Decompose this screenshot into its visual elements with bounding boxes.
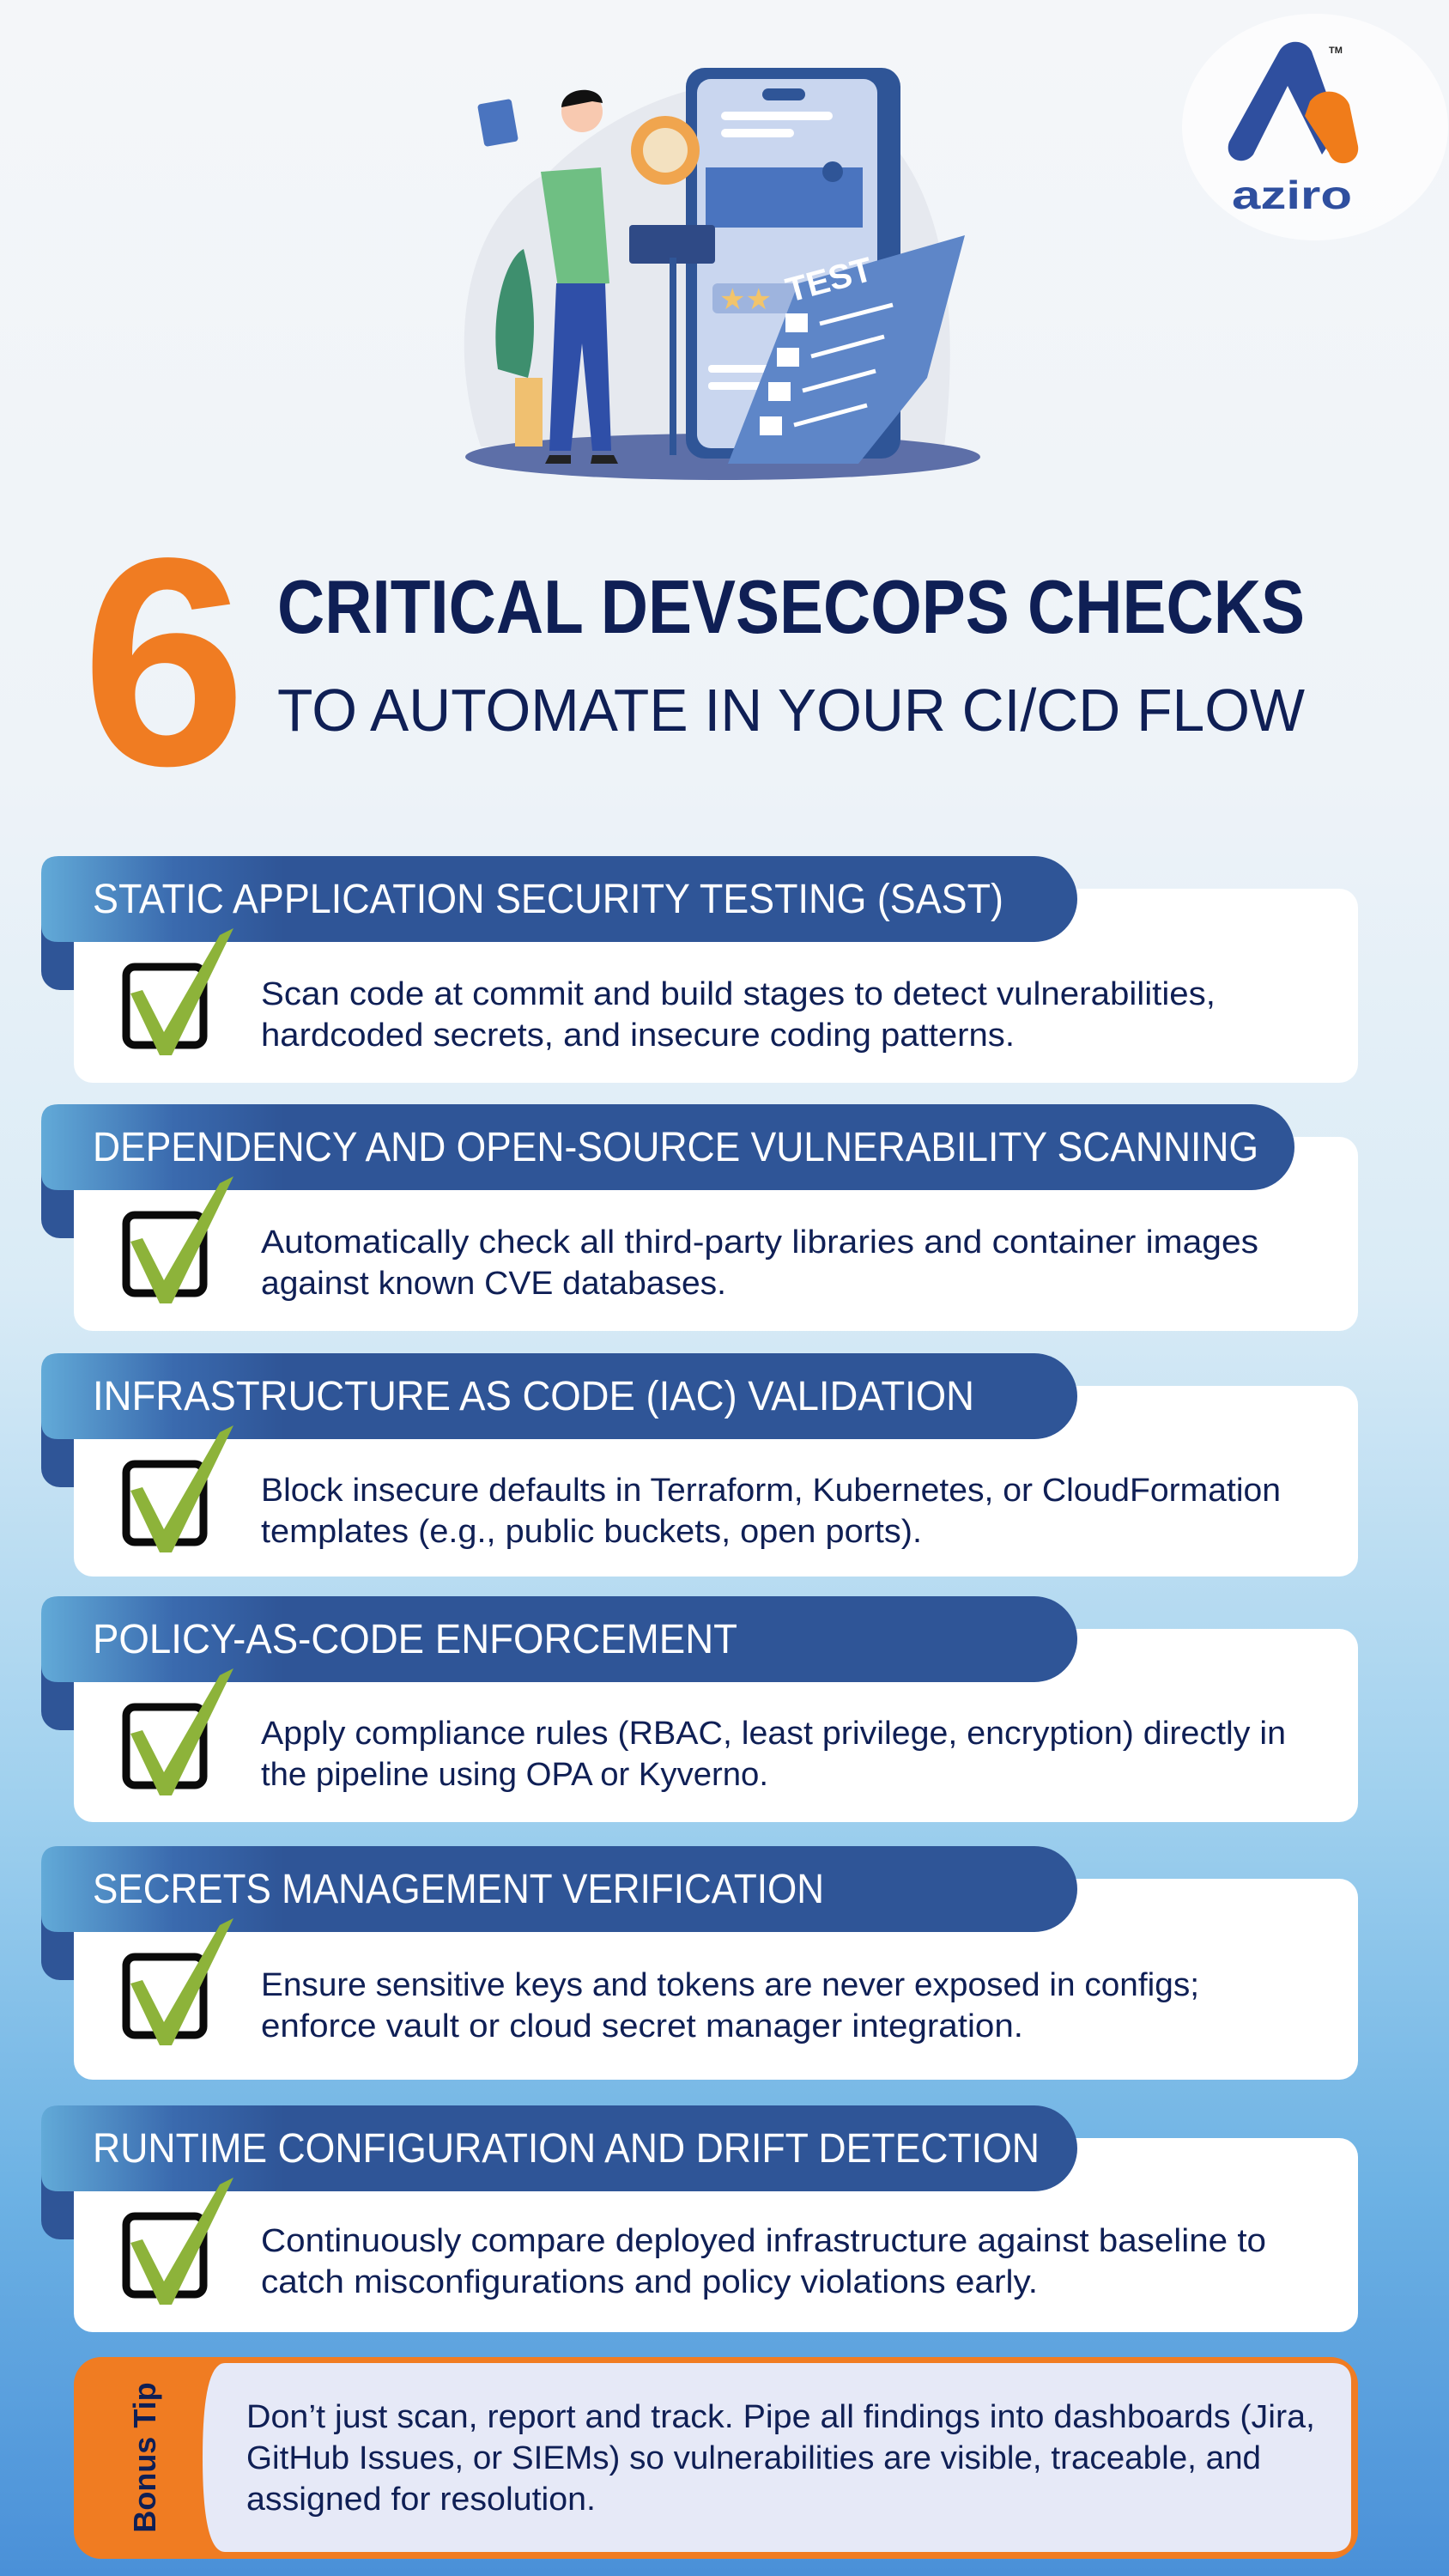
bonus tip panel: Don’t just scan, report and track. Pipe all findings into dashboards (Jira, [246,2399,1315,2435]
hero illustration: TEST [782,251,876,310]
title: subheading: TO AUTOMATE IN YOUR CI/CD FLOW [277,677,1305,744]
card 1: SAST: Scan code at commit and build stages to detect vulnerabilities, [261,976,1216,1012]
card 4: policy-as-code: the pipeline using OPA or Kyverno. [261,1757,768,1793]
card 2: dependency scanning: against known CVE databases. [261,1266,726,1302]
hero illustration: ★★ [719,283,772,316]
card 6: runtime drift: Continuously compare deployed infrastructure against baseline to [261,2223,1266,2259]
card 4: policy-as-code: POLICY-AS-CODE ENFORCEMENT [93,1617,737,1662]
card 5: secrets management: enforce vault or cloud secret manager integration. [261,2008,1023,2044]
logo: aziro: TM [1329,46,1343,56]
card 1: SAST: hardcoded secrets, and insecure coding patterns. [261,1018,1015,1054]
card 3: IaC validation: INFRASTRUCTURE AS CODE (IAC) VALIDATION [93,1374,974,1419]
card 5: secrets management: Ensure sensitive keys and tokens are never exposed in configs; [261,1967,1199,2003]
card 1: SAST [41,856,1358,1083]
hero illustration [464,68,980,480]
card 3: IaC validation: templates (e.g., public buckets, open ports). [261,1514,922,1550]
bonus tip panel: assigned for resolution. [246,2482,596,2518]
card 6: runtime drift [41,2105,1358,2332]
bonus tip panel: Bonus Tip [127,2382,162,2533]
card 2: dependency scanning [41,1104,1358,1331]
card 6: runtime drift: catch misconfigurations and policy violations early. [261,2264,1038,2300]
logo: aziro: aziro [1232,173,1352,217]
card 2: dependency scanning: DEPENDENCY AND OPEN-SOURCE VULNERABILITY SCANNING [93,1125,1258,1170]
title: big number 6: 6 [82,497,246,828]
card 2: dependency scanning: Automatically check all third-party libraries and container images [261,1224,1258,1261]
title: main heading: CRITICAL DEVSECOPS CHECKS [277,564,1305,649]
bonus tip panel: GitHub Issues, or SIEMs) so vulnerabilities are visible, traceable, and [246,2440,1261,2476]
card 6: runtime drift: RUNTIME CONFIGURATION AND DRIFT DETECTION [93,2126,1040,2172]
card 5: secrets management: SECRETS MANAGEMENT VERIFICATION [93,1867,824,1912]
logo: aziro [1182,14,1448,240]
card 4: policy-as-code: Apply compliance rules (RBAC, least privilege, encryption) directly in [261,1716,1286,1752]
card 3: IaC validation [41,1353,1358,1577]
card 3: IaC validation: Block insecure defaults in Terraform, Kubernetes, or CloudFormation [261,1473,1281,1509]
card 4: policy-as-code [41,1596,1358,1822]
card 1: SAST: STATIC APPLICATION SECURITY TESTING (SAST) [93,877,1003,922]
bonus tip panel [74,2357,1358,2559]
card 5: secrets management [41,1846,1358,2080]
